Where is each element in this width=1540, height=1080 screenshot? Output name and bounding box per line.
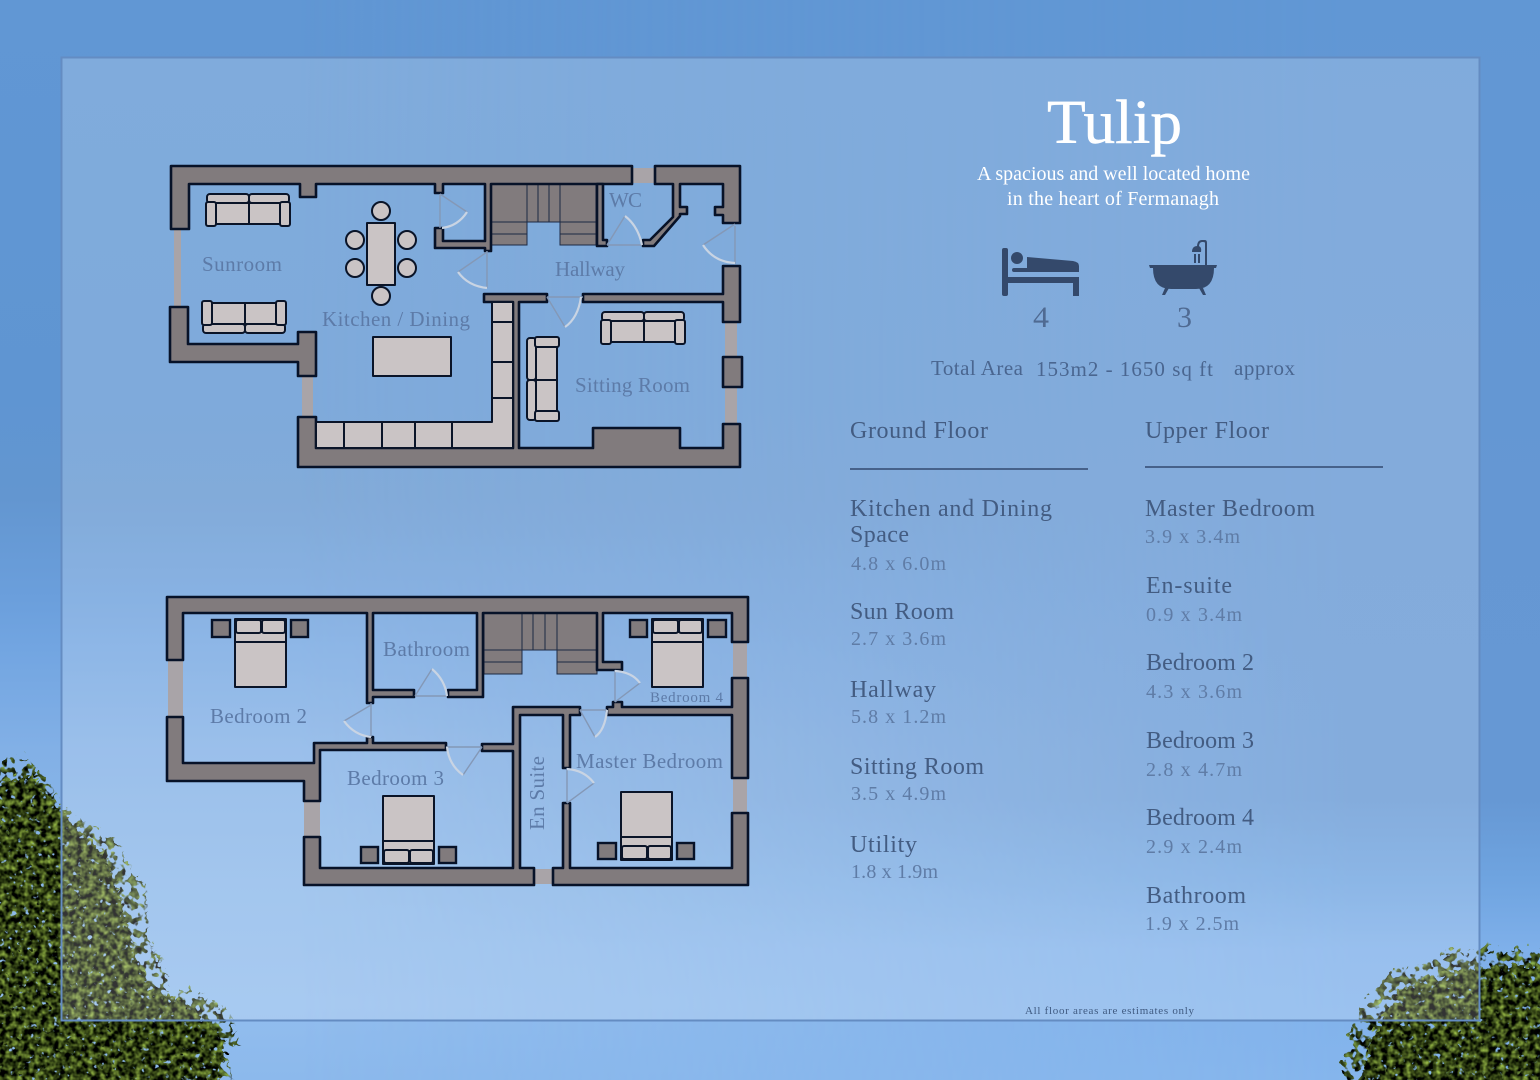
ground floor column: 1.8 x 1.9m — [851, 861, 938, 883]
room labels ground floor — [202, 188, 690, 397]
bedroom count: 4 — [1033, 301, 1049, 334]
room labels upper floor: Bathroom — [383, 637, 470, 661]
windows ground floor — [174, 168, 737, 424]
total area: Total Area — [931, 356, 1024, 380]
upper floor plan — [167, 597, 748, 885]
upper floor column: Bedroom 2 — [1146, 650, 1254, 676]
ground floor column: Ground Floor — [850, 418, 988, 444]
windows upper floor — [168, 642, 747, 884]
room labels upper floor: En Suite — [525, 756, 549, 830]
room labels upper floor: Bedroom 3 — [347, 766, 444, 790]
room labels upper floor: Bedroom 4 — [650, 690, 724, 706]
upper floor column: 2.9 x 2.4m — [1146, 836, 1242, 858]
doors upper floor — [344, 669, 640, 803]
upper floor column — [1145, 418, 1383, 935]
ground floor column: 3.5 x 4.9m — [851, 783, 946, 805]
worktop — [316, 302, 513, 448]
subtitle — [977, 163, 1250, 210]
room labels ground floor: Sunroom — [202, 252, 282, 276]
upper floor column: 2.8 x 4.7m — [1146, 759, 1242, 781]
title: Tulip — [1047, 89, 1182, 157]
tree left — [0, 756, 243, 1080]
ground floor column: Kitchen and Dining — [850, 496, 1052, 522]
upper floor column: Bathroom — [1146, 883, 1246, 909]
ground floor column: Hallway — [850, 677, 936, 703]
room labels upper floor: Master Bedroom — [576, 749, 723, 773]
bedroom 3 furniture — [361, 796, 456, 864]
ground floor column: Utility — [850, 832, 917, 858]
walls ground floor — [170, 166, 742, 467]
upper floor column: Master Bedroom — [1145, 496, 1315, 522]
ground floor column: 2.7 x 3.6m — [851, 628, 946, 650]
master bedroom furniture — [598, 792, 694, 860]
stairs ground floor — [491, 184, 596, 245]
ground floor column: Sun Room — [850, 599, 954, 625]
total area: approx — [1234, 356, 1296, 380]
upper floor column: Upper Floor — [1145, 418, 1269, 444]
upper floor column: 3.9 x 3.4m — [1145, 526, 1240, 548]
subtitle: A spacious and well located home — [977, 163, 1250, 185]
upper floor column: Bedroom 3 — [1146, 728, 1254, 754]
total area: 153m2 - 1650 sq ft — [1036, 357, 1213, 381]
icon: bed — [1002, 248, 1079, 296]
bedroom 4 furniture — [630, 619, 726, 687]
ground floor column — [850, 418, 1088, 883]
upper floor column: 4.3 x 3.6m — [1146, 681, 1242, 703]
dining table and chairs — [346, 202, 416, 305]
ground floor column: 5.8 x 1.2m — [851, 706, 946, 728]
total area — [931, 356, 1296, 381]
sofa sitting room top — [601, 312, 685, 344]
upper floor column: Bedroom 4 — [1146, 805, 1254, 831]
footnote: All floor areas are estimates only — [1025, 1005, 1194, 1017]
ground floor column: Sitting Room — [850, 754, 984, 780]
sofa sunroom bottom — [202, 301, 286, 333]
upper floor column: En-suite — [1146, 573, 1232, 599]
sofa sunroom top — [206, 194, 290, 226]
ground floor column: 4.8 x 6.0m — [851, 553, 946, 575]
room labels upper floor: Bedroom 2 — [210, 704, 307, 728]
room labels ground floor: Kitchen / Dining — [322, 307, 470, 331]
tree right — [1345, 948, 1540, 1080]
room labels ground floor: Sitting Room — [575, 373, 690, 397]
room labels upper floor — [210, 637, 724, 830]
upper floor column: 1.9 x 2.5m — [1145, 913, 1239, 935]
kitchen island — [373, 337, 451, 376]
bathroom count: 3 — [1177, 301, 1192, 334]
subtitle: in the heart of Fermanagh — [1007, 188, 1219, 210]
walls upper floor — [167, 597, 748, 885]
room labels ground floor: Hallway — [555, 257, 626, 281]
ground floor plan — [170, 166, 742, 467]
icon: bath — [1149, 240, 1217, 295]
upper floor column: 0.9 x 3.4m — [1146, 604, 1242, 626]
room labels ground floor: WC — [609, 188, 642, 212]
ground floor column: Space — [850, 522, 909, 548]
bedroom 2 furniture — [212, 619, 308, 687]
stairs upper floor — [484, 613, 597, 674]
doors ground floor — [440, 194, 735, 327]
sofa sitting room left — [527, 337, 559, 421]
